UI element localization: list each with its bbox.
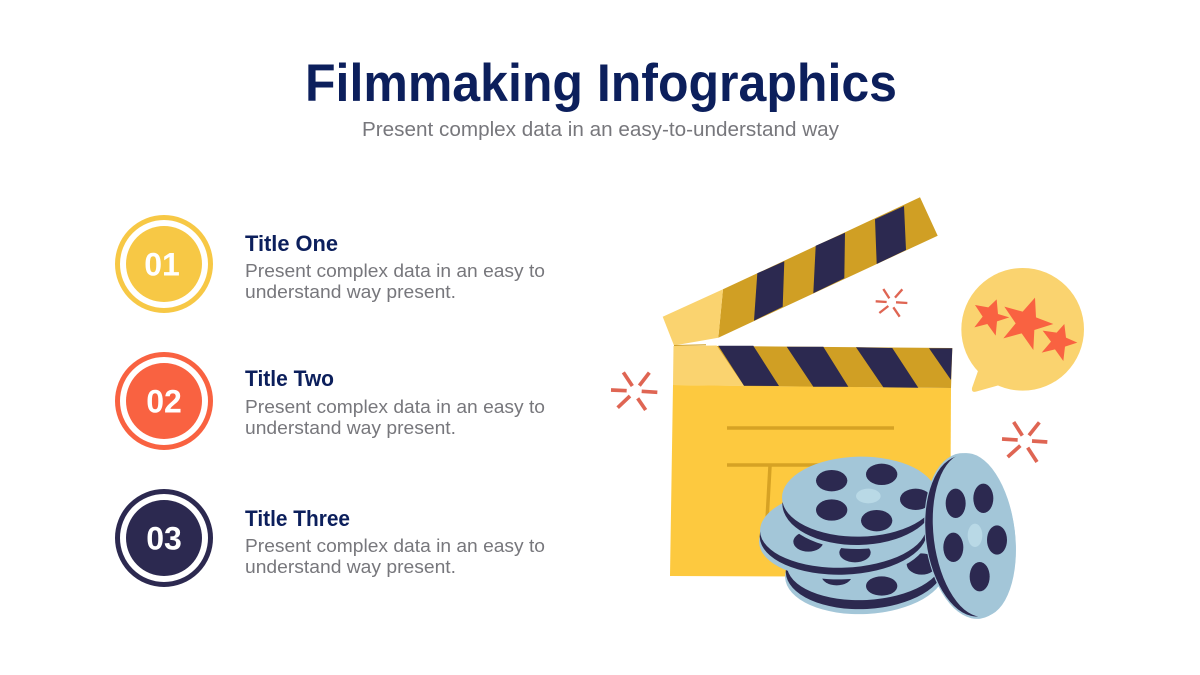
heading: title one: Title One <box>245 231 338 256</box>
text: description one <box>245 261 545 302</box>
subtitle: Present complex data in an easy-to-understand way <box>362 119 839 141</box>
badge 01 <box>118 218 210 310</box>
bubble <box>961 268 1084 392</box>
badge 03: 03 <box>146 520 182 556</box>
standing reel <box>915 448 1025 624</box>
text: description one: understand way present. <box>245 282 456 302</box>
text: description three <box>245 536 545 577</box>
icon: speech bubble with stars <box>961 268 1084 392</box>
bottom reel <box>783 519 947 618</box>
clapper board body <box>670 385 951 577</box>
clapper board lines <box>727 428 894 520</box>
item two <box>118 354 545 448</box>
text: description one: Present complex data in an easy to <box>245 261 545 281</box>
badge 02 <box>118 354 210 448</box>
item three <box>118 492 545 584</box>
icon: sparkle left <box>611 372 657 410</box>
icon: clapperboard <box>663 197 952 577</box>
badge 02: 02 <box>146 384 182 420</box>
clapper striped band <box>673 345 952 388</box>
text: description two: Present complex data in an easy to <box>245 397 545 417</box>
badge 01: 01 <box>144 246 180 282</box>
text: description three: understand way present. <box>245 557 456 577</box>
text: description two <box>245 397 545 438</box>
three stars <box>974 298 1077 361</box>
badge 03 <box>118 492 210 584</box>
heading: title three: Title Three <box>245 506 350 531</box>
clapper arm <box>663 197 938 346</box>
item one <box>118 218 545 310</box>
middle reel <box>758 486 929 582</box>
title: Filmmaking Infographics <box>305 54 897 113</box>
icon: sparkle top <box>876 289 907 317</box>
text: description two: understand way present. <box>245 418 456 438</box>
top reel <box>781 455 937 550</box>
icon: sparkle right <box>1002 422 1047 462</box>
text: description three: Present complex data in an easy to <box>245 536 545 556</box>
heading: title two: Title Two <box>245 366 334 391</box>
icon: film reels <box>758 448 1025 624</box>
